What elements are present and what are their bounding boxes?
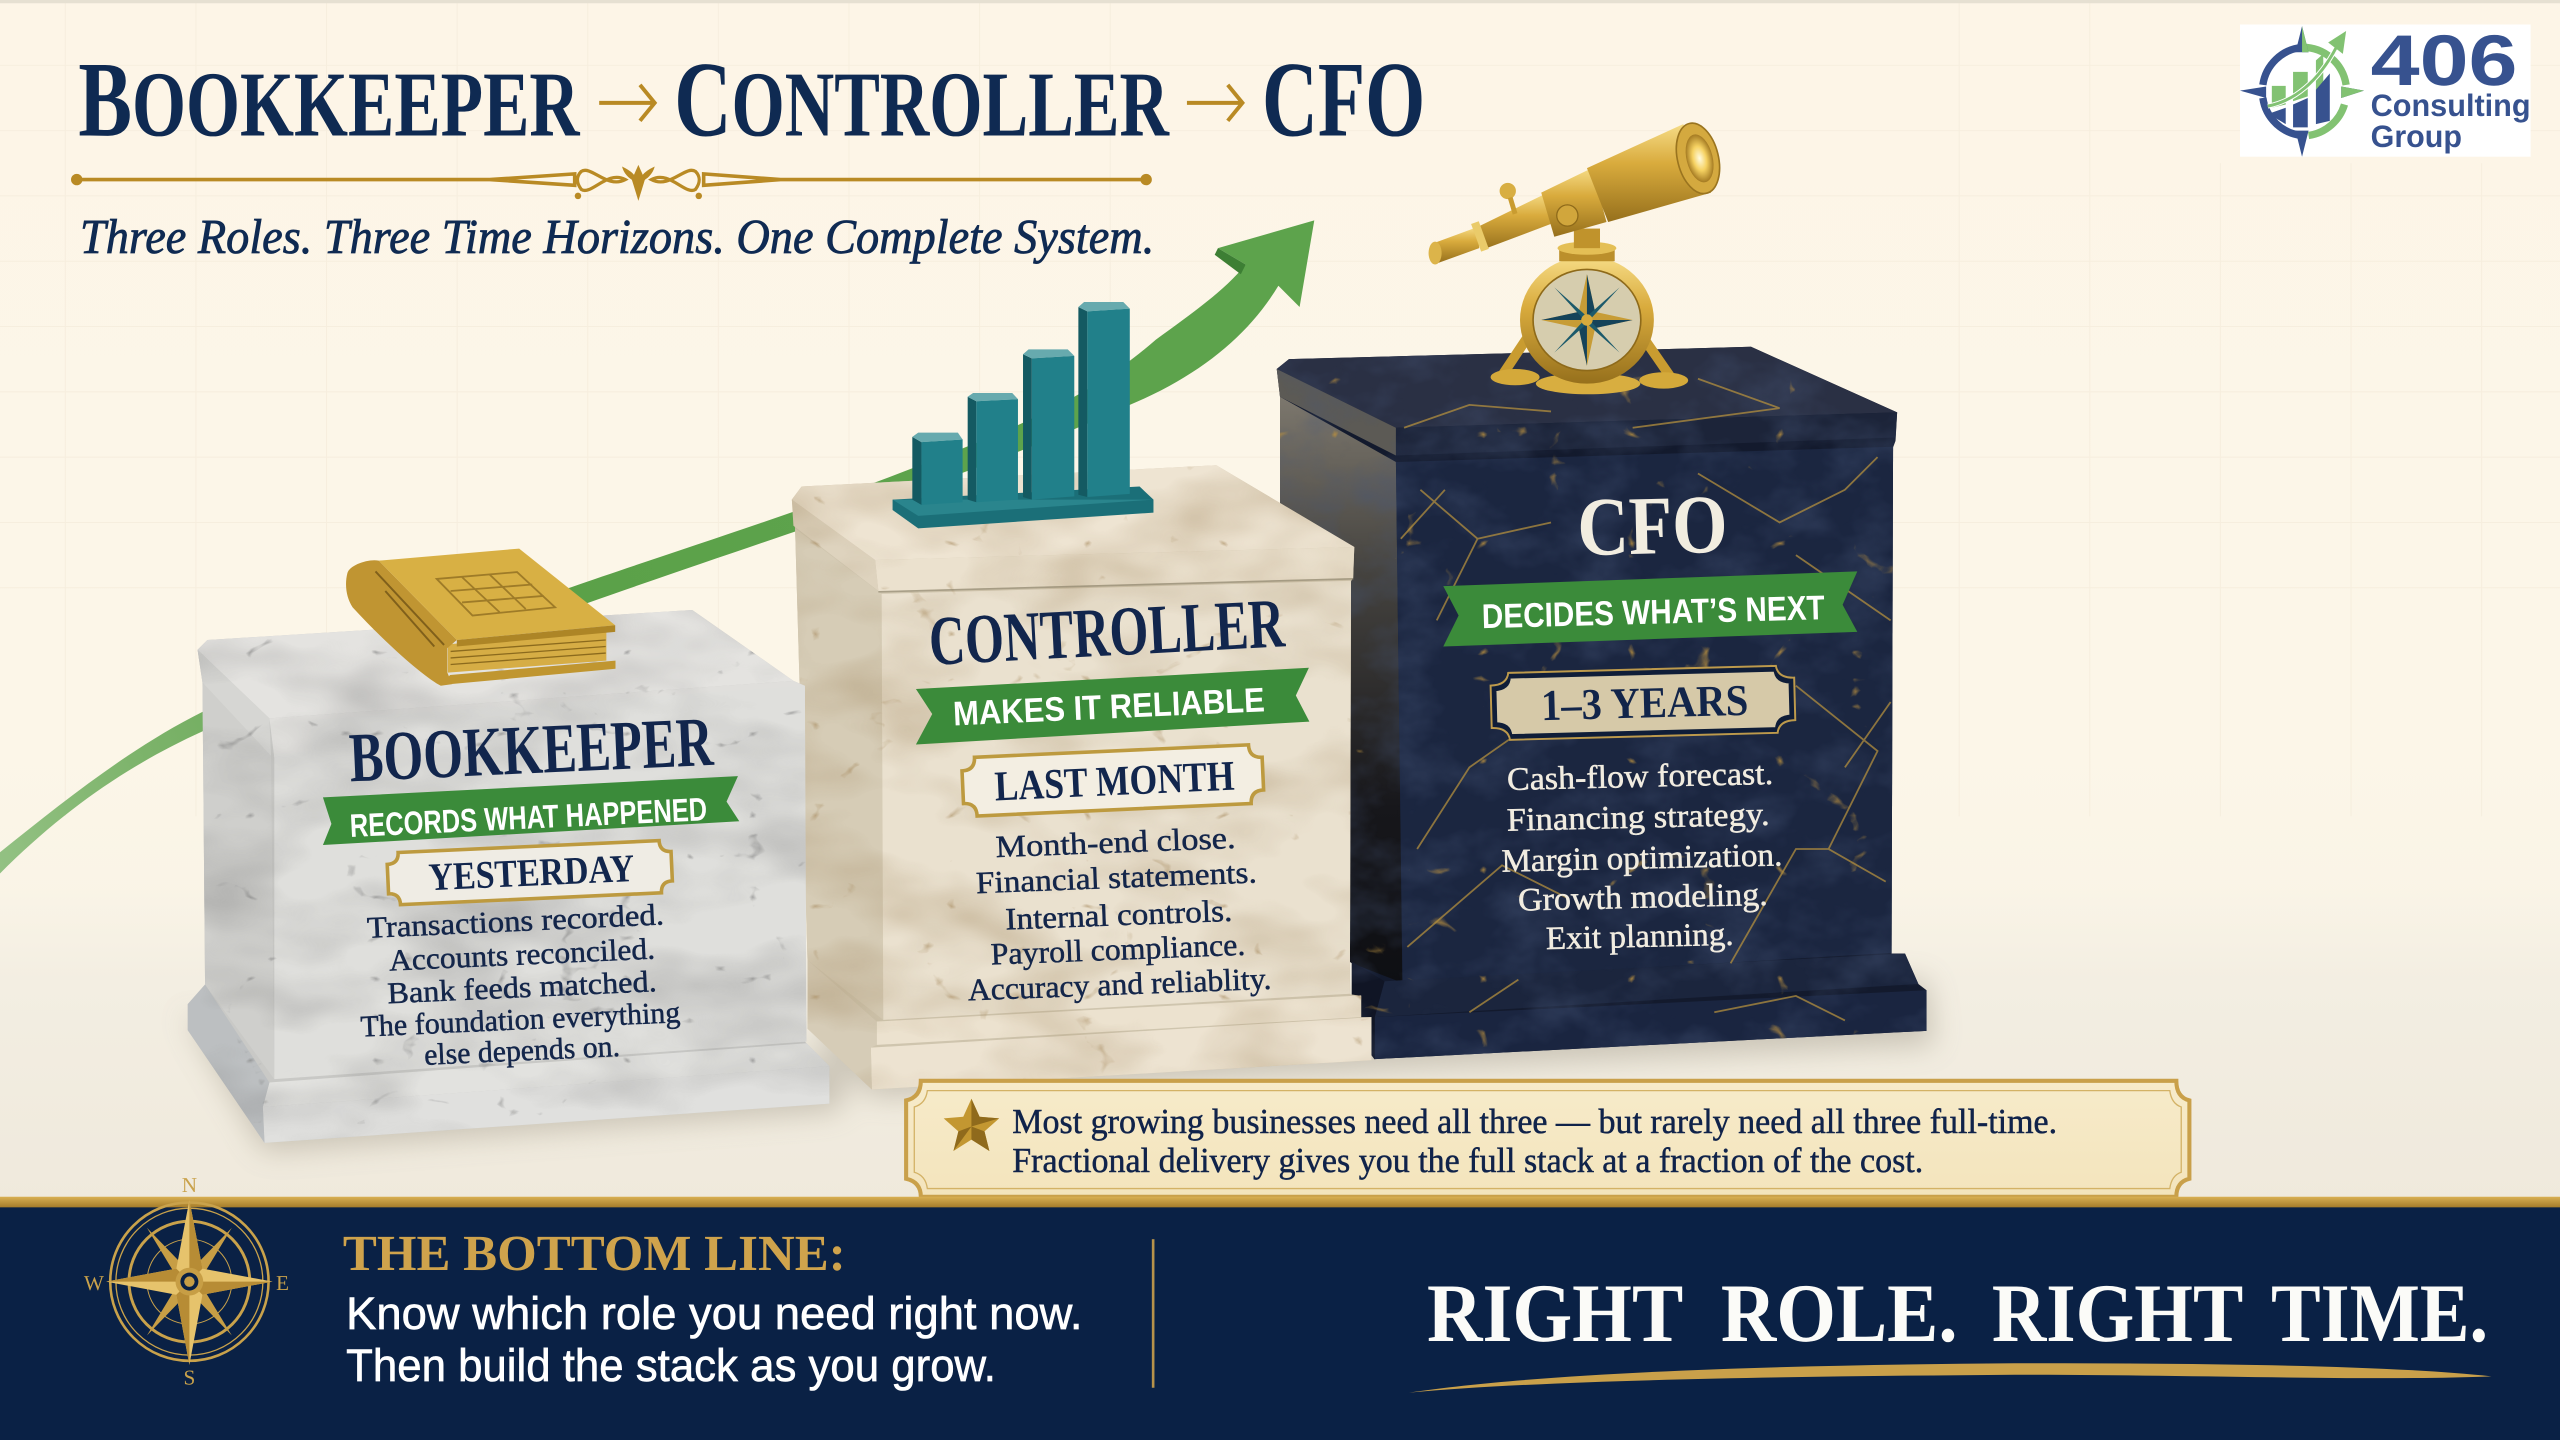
Bookkeeper duties: Transactions recorded. bbox=[366, 900, 665, 946]
callout text bbox=[1012, 1102, 2057, 1180]
CFO duties: Exit planning. bbox=[1546, 917, 1734, 957]
icon: gold star bbox=[944, 1099, 999, 1151]
icon: compass rose: S bbox=[183, 1365, 195, 1389]
slogan: TIME. bbox=[2271, 1269, 2488, 1361]
bottom line text: Know which role you need right now. bbox=[346, 1288, 1082, 1339]
Bookkeeper duties bbox=[360, 900, 681, 1073]
Controller duties: Financial statements. bbox=[975, 856, 1257, 901]
callout text: Most growing businesses need all three — but rarely need all three full-time. bbox=[1012, 1102, 2057, 1141]
subtitle: Three Roles. Three Time Horizons. One Complete System. bbox=[80, 211, 1154, 264]
bottom band bbox=[0, 1197, 2560, 1440]
logo: 406 Consulting Group: Consulting bbox=[2371, 90, 2531, 124]
plaque: yesterday: YESTERDAY bbox=[428, 848, 635, 900]
callout text: Fractional delivery gives you the full stack at a fraction of the cost. bbox=[1012, 1141, 1923, 1180]
panel: Controller block bbox=[792, 302, 1371, 1089]
icon: brass telescope on compass stand bbox=[1429, 119, 1726, 394]
Bookkeeper duties: Bank feeds matched. bbox=[387, 967, 657, 1011]
growth arrow bbox=[0, 220, 1314, 873]
slogan: RIGHT bbox=[1427, 1269, 1683, 1361]
CFO marble body bbox=[1277, 347, 1927, 1060]
logo: 406 Consulting Group: Group bbox=[2371, 121, 2462, 155]
CFO duties: Margin optimization. bbox=[1501, 838, 1783, 880]
title: BOOKKEEPER bbox=[78, 41, 581, 160]
ribbon: decides what's next bbox=[1443, 571, 1857, 647]
Bookkeeper duties: else depends on. bbox=[423, 1031, 621, 1073]
Controller marble body bbox=[792, 465, 1371, 1089]
Bookkeeper duties: Accounts reconciled. bbox=[388, 934, 656, 979]
Controller duties: Month-end close. bbox=[995, 822, 1236, 865]
icon: teal bar chart bbox=[893, 302, 1153, 528]
ribbon: makes it reliable bbox=[916, 668, 1309, 744]
Bookkeeper marble body bbox=[188, 610, 829, 1143]
ornamental divider bbox=[72, 165, 1151, 201]
CFO duties: Growth modeling. bbox=[1518, 877, 1768, 919]
logo: 406 Consulting Group: 406 bbox=[2371, 21, 2518, 101]
plaque: yesterday bbox=[387, 840, 673, 905]
gold swoosh bbox=[1409, 1363, 2491, 1393]
floor shadows bbox=[183, 980, 1935, 1151]
callout: fractional delivery bbox=[906, 1081, 2189, 1197]
slogan: RIGHT bbox=[1992, 1269, 2243, 1361]
logo: 406 Consulting Group bbox=[2240, 21, 2531, 157]
Bookkeeper duties: The foundation everything bbox=[360, 998, 681, 1045]
CFO duties bbox=[1501, 756, 1783, 957]
logo compass mark bbox=[2240, 26, 2364, 157]
ribbon: decides what's next: DECIDES WHAT’S NEXT bbox=[1481, 590, 1825, 636]
Controller duties bbox=[967, 822, 1272, 1009]
ribbon: makes it reliable: MAKES IT RELIABLE bbox=[952, 682, 1266, 734]
bottom line text: Then build the stack as you grow. bbox=[346, 1340, 996, 1391]
title bbox=[78, 41, 1425, 160]
arrow: title second bbox=[1187, 85, 1242, 121]
Controller duties: Internal controls. bbox=[1005, 895, 1233, 938]
icon: compass rose: E bbox=[276, 1270, 289, 1295]
Bookkeeper label: BOOKKEEPER bbox=[348, 704, 716, 798]
title: CONTROLLER bbox=[674, 41, 1170, 160]
icon: compass rose bbox=[84, 1172, 289, 1389]
Controller label: CONTROLLER bbox=[927, 586, 1288, 681]
CFO label: CFO bbox=[1576, 480, 1729, 575]
bottom line text bbox=[346, 1288, 1082, 1391]
ribbon: records what happened: RECORDS WHAT HAPPENED bbox=[349, 792, 708, 845]
CFO duties: Financing strategy. bbox=[1506, 797, 1770, 839]
Controller duties: Accuracy and reliablity. bbox=[967, 963, 1272, 1009]
panel: CFO block bbox=[1277, 119, 1927, 1060]
ribbon: records what happened bbox=[323, 776, 739, 845]
plaque: last month: LAST MONTH bbox=[994, 752, 1235, 810]
plaque: 1–3 years: 1–3 YEARS bbox=[1540, 676, 1749, 730]
icon: gold ledger book bbox=[346, 549, 616, 686]
icon: compass rose: W bbox=[84, 1270, 105, 1295]
slogan bbox=[1427, 1269, 2488, 1361]
CFO duties: Cash-flow forecast. bbox=[1507, 756, 1774, 798]
slogan: ROLE. bbox=[1721, 1269, 1958, 1361]
panel: Bookkeeper block bbox=[188, 549, 829, 1143]
plaque: 1–3 years bbox=[1490, 665, 1796, 740]
arrow: title first bbox=[599, 85, 655, 121]
icon: compass rose: N bbox=[182, 1172, 198, 1197]
title: CFO bbox=[1262, 41, 1425, 160]
Controller duties: Payroll compliance. bbox=[990, 929, 1246, 973]
heading: the bottom line: THE BOTTOM LINE: bbox=[343, 1224, 846, 1282]
